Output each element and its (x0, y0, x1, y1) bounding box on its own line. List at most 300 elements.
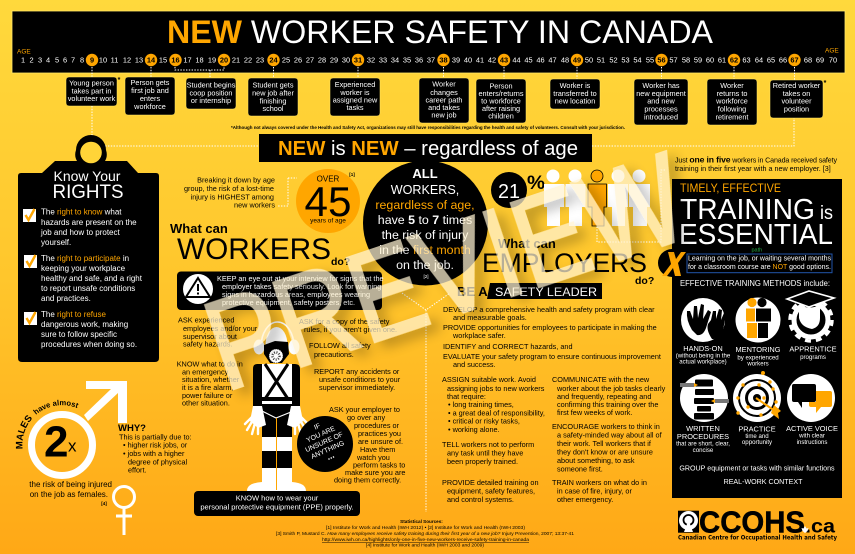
text: ask your employer: watch you (356, 453, 390, 462)
text: employer duties, left column: PROVIDE detailed training on (442, 478, 539, 487)
logo: ccohs: CCOHS (699, 505, 805, 540)
age timeline: 2 (29, 56, 34, 64)
milestone: age 38: career path (426, 96, 462, 105)
text: ask your employer: go over any (347, 413, 385, 422)
text: why: effort. (128, 466, 147, 475)
right to know: job and how to protect (40, 228, 120, 237)
age timeline: 44 (512, 56, 521, 64)
heading: what can workers do: What can (170, 221, 228, 236)
right to participate: to report unsafe conditions (41, 284, 135, 293)
text: know what to do: power failure or (182, 391, 233, 400)
heading: what can workers do: do? (331, 256, 350, 268)
label: hands-on: (without being in the (676, 352, 731, 359)
milestone: age 43: to workforce (481, 97, 521, 106)
milestone: age 62: returns to (717, 89, 747, 98)
label: hands-on (676, 344, 731, 365)
milestone: age 49 (550, 79, 600, 109)
text: ask experienced (178, 316, 258, 349)
milestone: age 14: first job and (131, 86, 169, 95)
text: know what to do: other situation. (182, 398, 230, 408)
heading: what can employers do: EMPLOYERS (482, 248, 647, 278)
text: know what to do: an emergency (182, 368, 229, 377)
age timeline: 54 (633, 56, 642, 64)
icon: warning triangle (183, 274, 213, 304)
text: follow: precautions. (314, 350, 354, 359)
milestone: age 24: school (262, 104, 284, 113)
text: employer duties, full width: and success. (453, 360, 496, 369)
milestone: age 62: Worker (720, 81, 744, 90)
age timeline: 20 (220, 56, 228, 64)
logo: ccohs: .ca (805, 517, 835, 538)
text: employer duties, right column: other emergency. (557, 495, 613, 504)
callout: over 45: years of age (310, 218, 346, 225)
milestone: age 9: takes part in (72, 86, 111, 95)
age timeline: 39 (452, 56, 460, 64)
label: written procedures: WRITTEN (686, 424, 720, 433)
heading: what can workers do: WORKERS (177, 233, 331, 266)
callout: if you are unsure: ... (325, 450, 336, 462)
age timeline: 55 (646, 56, 654, 64)
age timeline: 17 (183, 56, 192, 64)
panel: training is essential: EFFECTIVE TRAINING METHODS include: (680, 279, 830, 288)
age timeline: 36 (415, 56, 423, 64)
callout: all workers: in the first month (379, 243, 471, 257)
milestone: age 31: tasks (346, 103, 364, 112)
text: employer duties, left column: • long training times, (448, 400, 514, 409)
icon: mentoring (736, 298, 780, 342)
text: why: WHY? (118, 423, 146, 434)
callout: keep an eye out: employer takes safety seriously. Look for warning (222, 282, 381, 291)
milestone: age 16-20: coop position (189, 88, 233, 97)
age timeline: 50 (585, 56, 593, 64)
label: mentoring: MENTORING (735, 345, 781, 354)
text: know what to do: it is a fire alarm, (182, 383, 234, 392)
milestone: age 9: volunteer work (68, 94, 116, 103)
icon: male symbol with 2x stat: 2 (44, 418, 68, 467)
text: one in five (675, 155, 837, 173)
milestone: age 62: retirement (716, 112, 748, 121)
text: employer duties, full width: and measurable goals. (453, 313, 527, 322)
panel: know your rights: Know Your (54, 168, 121, 184)
age timeline (17, 48, 839, 80)
text: employer duties, right column: their work. Tell workers that if (557, 439, 652, 448)
icon: five workers (544, 170, 650, 226)
milestone: age 49: Worker is (560, 81, 591, 90)
milestone: age 16-20: Student begins (187, 81, 236, 90)
callout: over 45: OVER (317, 175, 340, 184)
callout: all workers: ALL (412, 166, 438, 181)
milestone: age 38: and takes (428, 103, 460, 112)
age timeline: 27 (306, 56, 314, 64)
text: employer duties, right column (552, 375, 666, 504)
text: employer duties, right column: and frequently, repeating and (557, 392, 651, 401)
milestone: age 31 (330, 78, 380, 116)
label: practice (738, 425, 776, 446)
callout: if you are unsure: UNSURE OF (304, 431, 344, 454)
panel: training is essential: path (752, 248, 762, 254)
milestone: age 49: transferred to (553, 89, 597, 98)
callout: over 45: 45 (304, 178, 352, 225)
panel: know your rights (18, 135, 159, 362)
text: employer duties, right column: first few weeks of work. (557, 408, 632, 417)
label: practice: time and (745, 433, 769, 440)
left glove (245, 406, 266, 434)
milestone: age 67 (770, 80, 827, 118)
figure: worker in PPE (245, 322, 308, 491)
age timeline: 63 (742, 56, 751, 64)
text: why: degree of physical (128, 457, 188, 466)
callout: all workers: [2] (423, 274, 429, 279)
text: know what to do: situation, whether (182, 375, 240, 384)
age timeline: 64 (755, 56, 763, 64)
label: active voice: instructions (797, 439, 827, 446)
text: employer duties, right column: TRAIN workers on what do in (552, 478, 647, 487)
age timeline: 58 (682, 56, 690, 64)
text: why: This is partially due to: (119, 432, 192, 441)
callout: keep an eye out: KEEP an eye out at your interview for signs that the (217, 274, 384, 283)
heading: what can employers do (482, 236, 654, 287)
age timeline: 6 (63, 56, 67, 64)
heading: be a safety leader: BE A (457, 284, 488, 299)
label: mentoring: by experienced (737, 354, 779, 361)
milestone: age 38: new job (431, 111, 457, 120)
text: statistical sources: [4] Institute for Work and Health (IWH 2003 and 2009) (366, 543, 484, 548)
text: employer duties, left column (442, 375, 545, 504)
label: written procedures (676, 424, 730, 454)
text: employer duties, right column: worker about the job tasks clearly (556, 384, 666, 393)
milestone: age 9 (66, 77, 121, 106)
text: ask your employer: ASK your employer to (329, 405, 400, 414)
text: risk by age group (184, 175, 275, 210)
text: report: REPORT any accidents or (314, 367, 400, 376)
milestone: age 38 (419, 78, 469, 123)
age timeline: 9 (90, 56, 94, 64)
label: practice: PRACTICE (738, 425, 776, 434)
milestone: age 9: Young person (69, 79, 114, 88)
callout: know how to wear ppe: KNOW how to wear your (236, 494, 319, 502)
milestone: age 67: takes on (783, 89, 810, 98)
milestone: age 43: Person (489, 81, 513, 90)
text: one in five: Just one in five workers in Canada received safety (675, 155, 837, 165)
milestone: age 62: workforce (715, 97, 748, 106)
age timeline: 68 (804, 56, 812, 64)
icon: written procedures (680, 374, 729, 422)
age timeline: 46 (536, 56, 545, 64)
callout: all workers: on the job. (396, 258, 454, 272)
age timeline: 19 (208, 56, 216, 64)
age timeline: 3 (38, 56, 42, 64)
right to know: The right to know what (41, 208, 122, 217)
age timeline: 67 (790, 56, 799, 64)
milestone: age 38: changes (430, 88, 458, 97)
text: risk by age group: Breaking it down by age (197, 175, 275, 184)
text: ask your employer: practices you (358, 429, 401, 438)
text: ask your employer (329, 405, 405, 484)
age timeline: 29 (330, 56, 338, 64)
age timeline: 10 (99, 56, 107, 64)
milestone: age 56: and new (647, 97, 676, 106)
text: follow: FOLLOW all safety (309, 341, 371, 350)
panel: training is essential: TRAINING (680, 194, 815, 226)
age timeline: 14 (147, 56, 156, 64)
callout: all workers: have 5 to 7 times (378, 213, 472, 227)
age timeline: 21 (232, 56, 240, 64)
callout: if you are unsure (297, 416, 353, 472)
age timeline: 5 (55, 56, 59, 64)
age timeline: 59 (694, 56, 702, 64)
callout: all workers: the risk of injury (382, 228, 469, 242)
age timeline: 66 (779, 56, 787, 64)
stat: 21 percent (491, 172, 545, 208)
label: apprentice (789, 345, 837, 361)
callout: keep an eye out (177, 272, 384, 310)
callout: all workers: regardless of age, (375, 198, 475, 212)
milestone: age 56 (634, 79, 688, 125)
milestone: age 67: position (784, 105, 809, 114)
stat: 21 percent: 21 (498, 181, 520, 203)
callout: if you are unsure: IF (313, 423, 322, 432)
age timeline: 28 (318, 56, 326, 64)
heading: what can workers do (170, 221, 350, 268)
text: employer duties, left column: been properly trained. (447, 457, 518, 466)
right to participate: The right to participate in (41, 254, 129, 263)
age timeline: 69 (816, 56, 824, 64)
icon: practice target (733, 371, 781, 422)
label: apprentice: APPRENTICE (789, 345, 837, 354)
milestone: age 62 (707, 79, 757, 125)
age timeline: AGE (825, 48, 839, 54)
label: active voice: with clear (798, 432, 825, 439)
icon: apprentice gear and cap (787, 291, 834, 341)
text: ask your employer: make sure you are (345, 468, 405, 477)
callout: know how to wear ppe (194, 491, 360, 516)
icon: hands-on (681, 298, 726, 342)
right to participate: healthy and safe, and a right (41, 274, 143, 283)
text: employer duties, full width: DEVELOP a comprehensive health and safety program with clear (443, 305, 655, 314)
watermark: preview: PREVIEW (189, 126, 703, 419)
age timeline: 60 (706, 56, 714, 64)
milestone: age 14 (125, 77, 175, 115)
milestone: age 43: after raising (482, 104, 520, 113)
milestone: age 56: new equipment (636, 89, 686, 98)
text: employer duties, right column: ENCOURAGE workers to think in (552, 422, 660, 431)
right to refuse: procedures when doing so. (41, 340, 137, 349)
age timeline: 18 (195, 56, 204, 64)
panel: training is essential: Learning on the job, or waiting several months (688, 254, 831, 262)
text: risk of being injured: the risk of being injured (29, 480, 112, 489)
age timeline: AGE (17, 48, 31, 56)
text: employer duties, right column: someone first. (557, 464, 603, 474)
text: ask experienced: safety hazards. (183, 340, 232, 349)
text: group equipment: GROUP equipment or tasks with similar functions (679, 465, 835, 473)
text: statistical sources: http://www.iwh.on.ca/highlights/only-one-in-five-new-workers-receive-safety-training-in-canada (322, 537, 529, 542)
callout: keep an eye out: protective equipment, safety posters, etc. (222, 298, 355, 307)
icon: male symbol with 2x stat: MALES have almost (16, 400, 78, 449)
milestone: age 24: Student gets (253, 81, 294, 90)
text: risk by age group: injury is HIGHEST among (191, 192, 274, 201)
text: employer duties, full width: IDENTIFY and CORRECT hazards, and (443, 342, 573, 351)
age timeline: 41 (476, 56, 484, 64)
age timeline: 30 (342, 56, 350, 64)
age timeline: 22 (244, 56, 252, 64)
milestone: age 62: following (718, 105, 746, 114)
age timeline: 43 (500, 56, 508, 64)
text: why: • jobs with a higher (123, 449, 185, 458)
age timeline: 13 (135, 56, 143, 64)
age timeline: 45 (524, 56, 533, 64)
text: why (118, 423, 192, 475)
milestone: age 38: Worker (432, 80, 456, 89)
text: employer duties, right column: they don't know or are unsure (557, 448, 653, 457)
age timeline: 37 (427, 56, 435, 64)
panel: know your rights: RIGHTS (52, 181, 124, 203)
age timeline: 8 (80, 56, 84, 64)
title: NEW WORKER SAFETY IN CANADA (167, 14, 713, 50)
milestone: age 24 (248, 78, 298, 116)
milestone: age 43 (476, 79, 526, 123)
callout: keep an eye out: signs in hazardous areas, employees wearing (222, 290, 370, 299)
text: employer duties, right column: confirming this training over the (557, 400, 658, 409)
text: statistical sources: Statistical Sources: (400, 519, 443, 524)
text: ask for rules (299, 317, 397, 334)
age timeline: 47 (548, 56, 557, 64)
label: written procedures: concise (693, 447, 714, 454)
age timeline: 49 (573, 56, 581, 64)
label: practice: opportunity (742, 439, 773, 446)
text: statistical sources: [3] Smith P, Mustard C. How many employees receive safety training during their first year of a new job? Injury Prevention, 2007; 13:37-41 (276, 531, 574, 536)
text: employer duties, left column: TELL workers not to perform (442, 440, 534, 449)
label: mentoring (735, 345, 781, 367)
age timeline: 48 (561, 56, 569, 64)
panel: training is essential: is (820, 203, 833, 224)
heading: be a safety leader (457, 283, 602, 299)
age timeline: 11 (111, 56, 118, 64)
milestone: age 16-20: or internship (191, 96, 231, 105)
age timeline: 57 (669, 56, 678, 64)
age timeline: 31 (354, 56, 362, 64)
age timeline: 16 (171, 56, 180, 64)
age timeline: 70 (829, 56, 837, 64)
age timeline: 61 (718, 56, 726, 64)
text: one in five: training in their first year with a new employer. [3] (675, 164, 831, 173)
text: employer duties, left column: equipment, safety features, (447, 487, 535, 496)
age timeline: 53 (621, 56, 630, 64)
right to refuse (24, 310, 137, 349)
age timeline: 1 (21, 56, 25, 64)
icon: male symbol with 2x stat (16, 381, 127, 479)
label: apprentice: programs (800, 354, 826, 361)
text: employer duties, right column: COMMUNICATE with the new (552, 375, 650, 384)
age timeline: 23 (256, 56, 264, 64)
age timeline: 26 (294, 56, 302, 64)
milestone: age 43: children (488, 112, 514, 121)
text: statistical sources (276, 519, 574, 548)
right to refuse: dangerous work, making (41, 320, 128, 329)
label: written procedures: that are short, clear, (676, 441, 730, 448)
callout: all workers (363, 160, 488, 286)
milestone: age 56: Worker has (642, 81, 680, 90)
text: know what to do: KNOW what to do in (177, 360, 243, 369)
milestone: age 14: Person gets (131, 78, 170, 87)
text: employer duties, full width (443, 305, 661, 369)
text: ask experienced: employees and/or your (183, 324, 258, 333)
age timeline: 52 (609, 56, 618, 64)
text: risk of being injured: [4] (101, 501, 107, 506)
right to know: hazards are present on the (41, 218, 137, 227)
text: ask your employer: are unsure of. (358, 437, 403, 446)
heading: be a safety leader: SAFETY LEADER (495, 285, 597, 299)
text: follow (309, 341, 371, 359)
label: active voice: ACTIVE VOICE (786, 424, 838, 433)
age timeline: 40 (464, 56, 472, 64)
label: hands-on: actual workplace) (679, 358, 727, 365)
text: report: unsafe conditions to your (319, 375, 401, 384)
right to participate: and practices. (41, 294, 91, 303)
milestone: age 9: * (118, 77, 121, 84)
logo: ccohs (678, 505, 837, 542)
text: real-work context: REAL-WORK CONTEXT (724, 478, 803, 486)
text: employer duties, left column: ASSIGN suitable work. Avoid (442, 375, 536, 384)
icon: orange x (658, 249, 686, 277)
label: active voice (786, 424, 838, 446)
text: employer duties, left column: any task until they have (447, 449, 523, 458)
callout: over 45 (296, 169, 360, 233)
text: statistical sources: [1] Institute for Work and Health (IWH 2012) • [2] Institute for Work and Health (IWH 2003) (326, 525, 526, 530)
milestone: age 67: * (824, 80, 827, 87)
text: ask experienced: ASK experienced (178, 316, 234, 325)
right to know: yourself. (41, 238, 71, 247)
age timeline: 42 (488, 56, 496, 64)
panel: training is essential: ESSENTIAL (679, 219, 833, 251)
right to participate: keeping your workplace (41, 264, 126, 273)
right to participate (24, 254, 143, 303)
milestone: age 24: finishing (260, 96, 286, 105)
milestone: age 24: new job after (252, 89, 294, 98)
text: ask your employer: perform tasks to (353, 460, 405, 470)
stat: 21 percent: % (527, 173, 545, 194)
milestone: age 31: assigned new (333, 96, 378, 104)
text: risk by age group: group, the risk of a lost-time (184, 184, 274, 193)
age timeline: 65 (767, 56, 775, 64)
text: employer duties, left column: that require: (447, 392, 486, 401)
panel: training is essential: for a classroom course are NOT good options. (688, 262, 831, 271)
milestone: age 67: Retired worker (773, 81, 821, 90)
milestone: age 67: volunteer (781, 97, 812, 106)
right to refuse: sure to follow specific (41, 330, 117, 339)
label: mentoring: workers (746, 360, 769, 367)
age timeline: 62 (730, 56, 738, 64)
icon: active voice speech bubbles (787, 374, 835, 422)
text: employer duties, left column: • critical or risky tasks, (448, 416, 520, 426)
right to know (23, 208, 137, 247)
text: employer duties, full width: workplace safer. (452, 331, 506, 340)
age timeline: 15 (159, 56, 167, 64)
text: risk by age group: new workers (234, 201, 275, 210)
icon: female symbol (114, 486, 134, 535)
milestone: age 14: workforce (133, 102, 166, 111)
text: employer duties, left column: and control systems. (447, 495, 514, 504)
age timeline: 38 (439, 56, 448, 64)
callout: all workers: WORKERS, (391, 183, 459, 197)
text: know what to do (177, 360, 243, 408)
text: ask for rules: ASK for a copy of the safety (299, 317, 390, 326)
text: report (314, 367, 401, 392)
text: employer duties, full width: EVALUATE your safety program to ensure continuous improvement (443, 352, 661, 361)
milestone: age 56: processes (644, 105, 678, 114)
text: employer duties, right column: a safety-minded way about all of (557, 431, 663, 440)
text: ask your employer: doing them correctly. (334, 476, 401, 484)
label: hands-on: HANDS-ON (683, 344, 723, 353)
